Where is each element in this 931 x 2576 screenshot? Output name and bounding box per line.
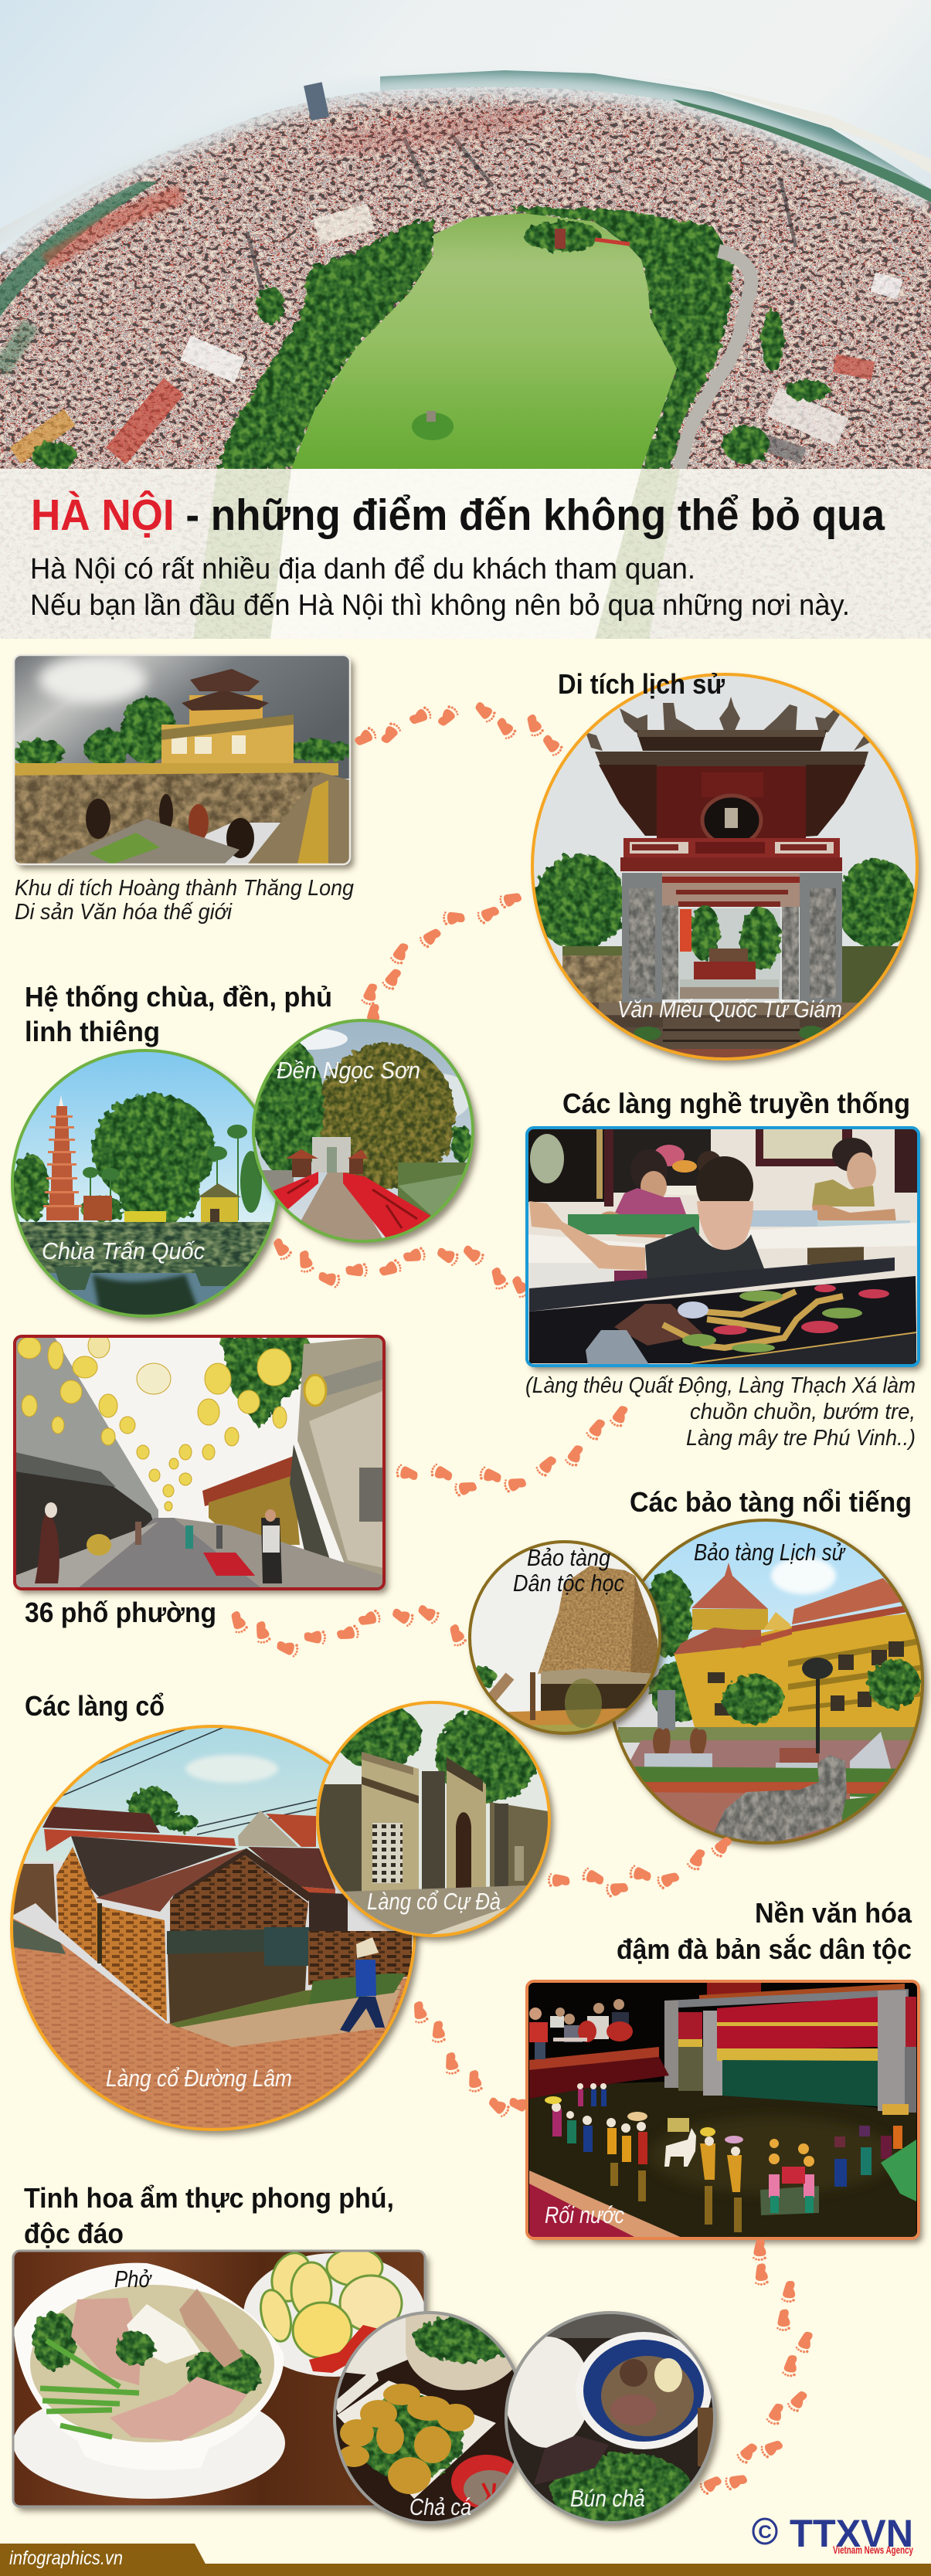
trees around the lake: [31, 207, 829, 470]
circle photo: Đền Ngọc Sơn: [251, 1018, 475, 1244]
caption: làng nghề: Làng mây tre Phú Vinh..): [686, 1426, 916, 1451]
caption: Hoàng thành: [15, 876, 354, 925]
caption: Bảo tàng Lịch sử: Bảo tàng Lịch sử: [694, 1539, 846, 1566]
road: [680, 251, 751, 469]
heading: Nền văn hóa đậm đà bản sắc dân tộc: [617, 1897, 912, 1965]
puppet horse: [664, 2118, 696, 2167]
circle photo: Làng cổ Đường Lâm: [8, 1722, 417, 2140]
heading: Nền văn hóa đậm đà bản sắc dân tộc: Nền văn hóa: [755, 1897, 912, 1929]
footprints: Văn Miếu to Đền Ngọc Sơn: [361, 888, 523, 1026]
ground: [8, 1916, 417, 2140]
intro line 2: Nếu bạn lần đầu đến Hà Nội thì không nên bỏ qua những nơi này.: [30, 589, 850, 622]
logo: TTXVN: TTXVN: [790, 2512, 913, 2555]
right woman: [812, 1138, 896, 1224]
intro line 1: Hà Nội có rất nhiều địa danh để du khách tham quan.: [30, 553, 695, 585]
footer bar: [0, 2544, 931, 2576]
caption: Đền Ngọc Sơn: Đền Ngọc Sơn: [277, 1057, 420, 1084]
circle photo: Bảo tàng Lịch sử: [603, 1514, 927, 1854]
heading: Các bảo tàng nổi tiếng: Các bảo tàng nổi tiếng: [630, 1486, 912, 1518]
left walls: [12, 1864, 56, 1923]
photo: Rối nước: [527, 1981, 919, 2238]
photo: làng nghề thêu: [527, 1128, 919, 1366]
caption: Làng cổ Đường Lâm: Làng cổ Đường Lâm: [106, 2065, 292, 2092]
caption: Hoàng thành: Khu di tích Hoàng thành Thăng Long: [15, 876, 354, 901]
caption heading: 36 phố phường: 36 phố phường: [25, 1597, 216, 1628]
circle photo: Văn Miếu: [525, 664, 927, 1081]
hero aerial photo of Hoan Kiem lake: [0, 0, 931, 470]
heading: Hệ thống chùa, đền, phủ: linh thiêng: [25, 1016, 160, 1047]
yellow lanterns: [18, 1333, 326, 1511]
caption: Bảo tàng Dân tộc học: Bảo tàng: [527, 1544, 610, 1571]
lemon plate: [243, 2248, 426, 2377]
main house: [71, 1836, 238, 1898]
puppet reflections: [610, 2163, 742, 2232]
Trấn Quốc pagoda: [43, 1095, 82, 1220]
header text panel: [0, 469, 931, 639]
photo: 36 phố phường: [15, 1333, 384, 1589]
footprints: rối nước to ẩm thực: [698, 2238, 814, 2496]
stage: [664, 1982, 916, 2113]
circle photo: Chả cá: [332, 2310, 529, 2526]
caption: Chùa Trấn Quốc: Chùa Trấn Quốc: [42, 1237, 205, 1264]
circle photo: Chùa Trấn Quốc: [8, 1047, 286, 1319]
footprints: 36 phố to bảo tàng: [226, 1604, 467, 1658]
copyright mark: C: [758, 2522, 772, 2543]
circle photo: Bảo tàng Dân tộc học: [467, 1541, 662, 1738]
city streets and roof tints: [0, 116, 900, 456]
heading: Các làng cổ: Các làng cổ: [25, 1690, 165, 1722]
water: [529, 2082, 916, 2238]
back houses: [42, 1807, 348, 1931]
copyright mark: [753, 2519, 776, 2544]
caption: Bảo tàng Dân tộc học: [513, 1544, 624, 1597]
caption: Hoàng thành: Di sản Văn hóa thế giới: [15, 900, 233, 925]
caption: Rối nước: Rối nước: [545, 2201, 624, 2228]
circle photo: Làng cổ Cự Đà: [313, 1699, 556, 1939]
heading: Di tích lịch sử: Di tích lịch sử: [558, 668, 725, 700]
caption: Phở: Phở: [114, 2265, 152, 2293]
Ngoc Son island: [524, 221, 630, 252]
woman walking: [340, 1937, 385, 2032]
footprints: chùa to làng nghề: [269, 1237, 532, 1300]
musicians: [529, 1999, 669, 2099]
Thap Rua islet: [412, 411, 454, 440]
lake: [291, 213, 677, 469]
caption: Làng cổ Cự Đà: Làng cổ Cự Đà: [367, 1888, 501, 1915]
left woman: [596, 1149, 686, 1238]
footer site name: infographics.vn: [9, 2547, 123, 2569]
heading: Tinh hoa ẩm thực: Tinh hoa ẩm thực phong phú,: [24, 2182, 394, 2214]
title: HÀ NỘI - những điểm đến không thể bỏ qua: [31, 490, 885, 540]
heading: Nền văn hóa đậm đà bản sắc dân tộc: đậm đà bản sắc dân tộc: [617, 1933, 912, 1965]
soup: [30, 2285, 274, 2442]
photo: Hoàng thành Thăng Long: [12, 655, 355, 864]
footprints: bảo tàng to làng cổ: [547, 1833, 733, 1899]
bowl: [14, 2263, 284, 2470]
caption: Văn Miếu Quốc Tử Giám: Văn Miếu Quốc Tử Giám: [617, 996, 842, 1023]
center woman: [529, 1151, 765, 1282]
circle photo: Bún chả: [502, 2310, 719, 2530]
water puppets: [545, 2083, 916, 2232]
caption: Bảo tàng Dân tộc học: Dân tộc học: [513, 1570, 624, 1597]
caption: làng nghề: [525, 1373, 916, 1451]
caption: Chả cá: Chả cá: [409, 2493, 471, 2520]
caption: làng nghề: chuồn chuồn, bướm tre,: [690, 1400, 916, 1424]
caption: Bún chả: Bún chả: [570, 2485, 645, 2512]
heading: Hệ thống chùa, đền, phủ: Hệ thống chùa, đền, phủ: [25, 981, 332, 1013]
heading: Tinh hoa ẩm thực: độc đáo: [24, 2218, 124, 2249]
temple roof ornaments: [586, 697, 872, 751]
footprints: Hoàng thành to Văn Miếu: [353, 701, 564, 758]
heading: Các làng nghề truyền thống: Các làng nghề truyền thống: [562, 1088, 910, 1119]
heading: Tinh hoa ẩm thực: [24, 2182, 394, 2249]
palm trees: [83, 1125, 262, 1224]
photo: Phở: [13, 2248, 426, 2506]
footprints: làng nghề to 36 phố: [396, 1403, 629, 1498]
saucer: [13, 2388, 285, 2499]
footprints: làng cổ to rối nước: [409, 2001, 532, 2119]
heading: Hệ thống chùa, đền, phủ: [25, 981, 332, 1047]
